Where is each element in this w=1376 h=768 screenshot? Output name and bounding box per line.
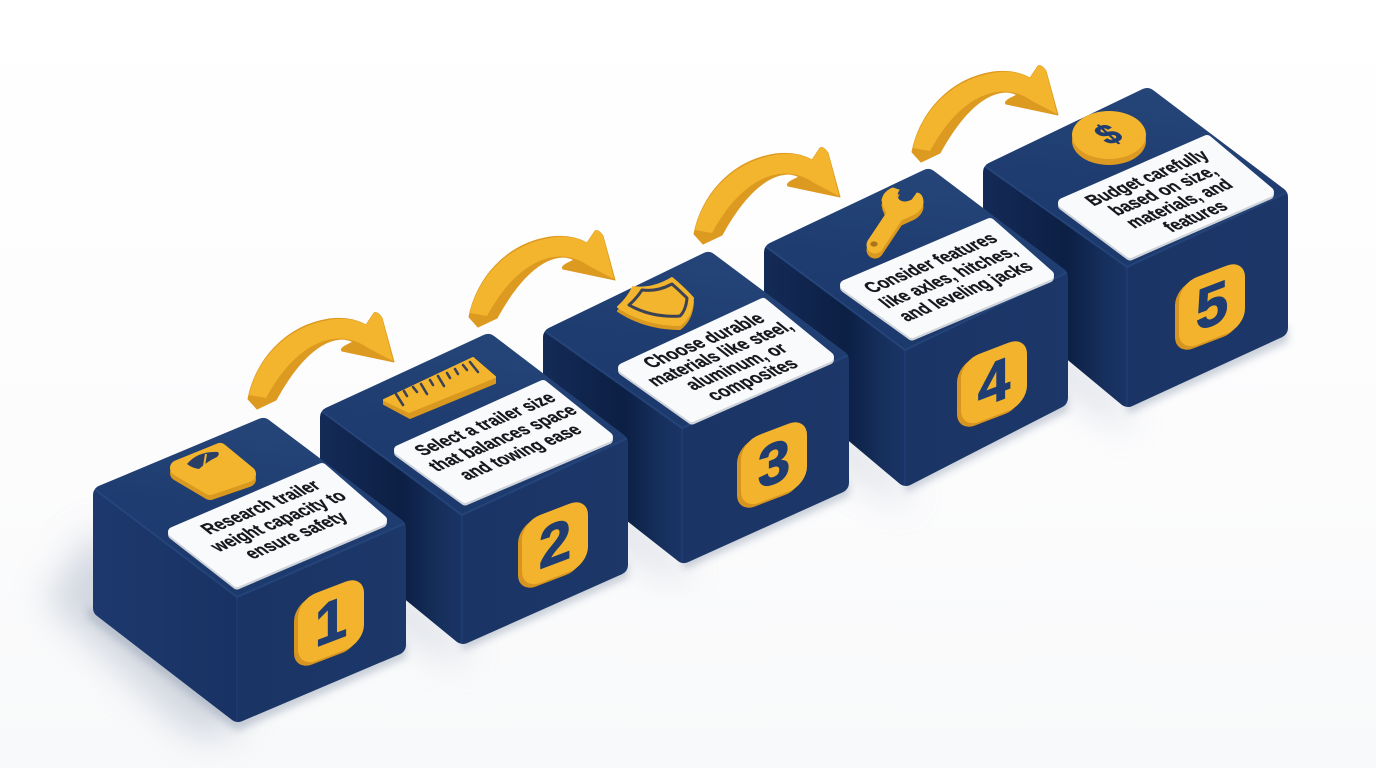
arrow: step 1 to step 2 bbox=[248, 313, 394, 409]
arrow: step 4 to step 5 bbox=[912, 66, 1058, 162]
block body bbox=[320, 334, 628, 644]
number badge 1 bbox=[294, 575, 364, 671]
text card: size: Select a trailer size bbox=[409, 389, 561, 459]
text card: budget: Budget carefully bbox=[1080, 146, 1214, 209]
text card: features: like axles, hitches, bbox=[874, 243, 1022, 311]
text card: materials: Choose durable bbox=[637, 309, 770, 372]
text card: size: and towing ease bbox=[454, 421, 587, 483]
number badge 5 bbox=[1175, 259, 1245, 355]
panel: step 5 block bbox=[975, 80, 1295, 415]
icon: weighing scale bbox=[178, 451, 248, 492]
number badge 3 bbox=[737, 417, 807, 513]
text card: budget: based on size, bbox=[1104, 162, 1222, 219]
icon: ruler bbox=[384, 358, 495, 418]
panel: step 4 block bbox=[755, 160, 1075, 495]
text card: budget: features bbox=[1158, 197, 1233, 235]
icon: wrench bbox=[870, 188, 923, 250]
text card: materials bbox=[623, 303, 830, 420]
number badge 4: 4 bbox=[978, 344, 1011, 421]
text card: budget: materials, and bbox=[1121, 176, 1238, 231]
icon: shield bbox=[618, 278, 693, 329]
text card: budget bbox=[1063, 140, 1269, 256]
text card: weight capacity: Research trailer bbox=[196, 477, 325, 537]
text card: weight capacity bbox=[173, 468, 382, 584]
panel: step 3 block bbox=[543, 252, 849, 564]
text card: features bbox=[845, 223, 1049, 336]
block body bbox=[975, 80, 1295, 415]
number badge 2 bbox=[518, 497, 588, 593]
number badge 5: 5 bbox=[1196, 267, 1228, 344]
block body bbox=[543, 252, 849, 564]
number badge 3: 3 bbox=[758, 425, 790, 502]
arrow: step 3 to step 4 bbox=[694, 148, 840, 244]
text card: size bbox=[399, 385, 608, 500]
block body bbox=[93, 418, 406, 722]
icon: dollar coin: $ bbox=[1086, 118, 1132, 151]
block body bbox=[755, 160, 1075, 495]
text card: features: Consider features bbox=[859, 230, 1002, 296]
panel: step 1 block bbox=[93, 418, 406, 722]
text card: materials: materials like steel, bbox=[641, 317, 798, 390]
text card: materials: aluminum, or bbox=[679, 339, 792, 393]
text card: size: that balances space bbox=[423, 402, 582, 475]
text card: weight capacity: ensure safety bbox=[239, 508, 352, 562]
number badge 1: 1 bbox=[315, 583, 347, 660]
text card: weight capacity: weight capacity to bbox=[204, 487, 351, 555]
icon: dollar coin bbox=[1072, 111, 1146, 165]
number badge 4 bbox=[957, 336, 1027, 432]
arrow: step 2 to step 3 bbox=[469, 231, 615, 327]
text card: materials: composites bbox=[701, 354, 803, 404]
text card: features: and leveling jacks bbox=[893, 258, 1038, 325]
floor shadows bbox=[45, 290, 1288, 735]
number badge 2: 2 bbox=[539, 505, 571, 582]
panel: step 2 block bbox=[320, 334, 628, 644]
